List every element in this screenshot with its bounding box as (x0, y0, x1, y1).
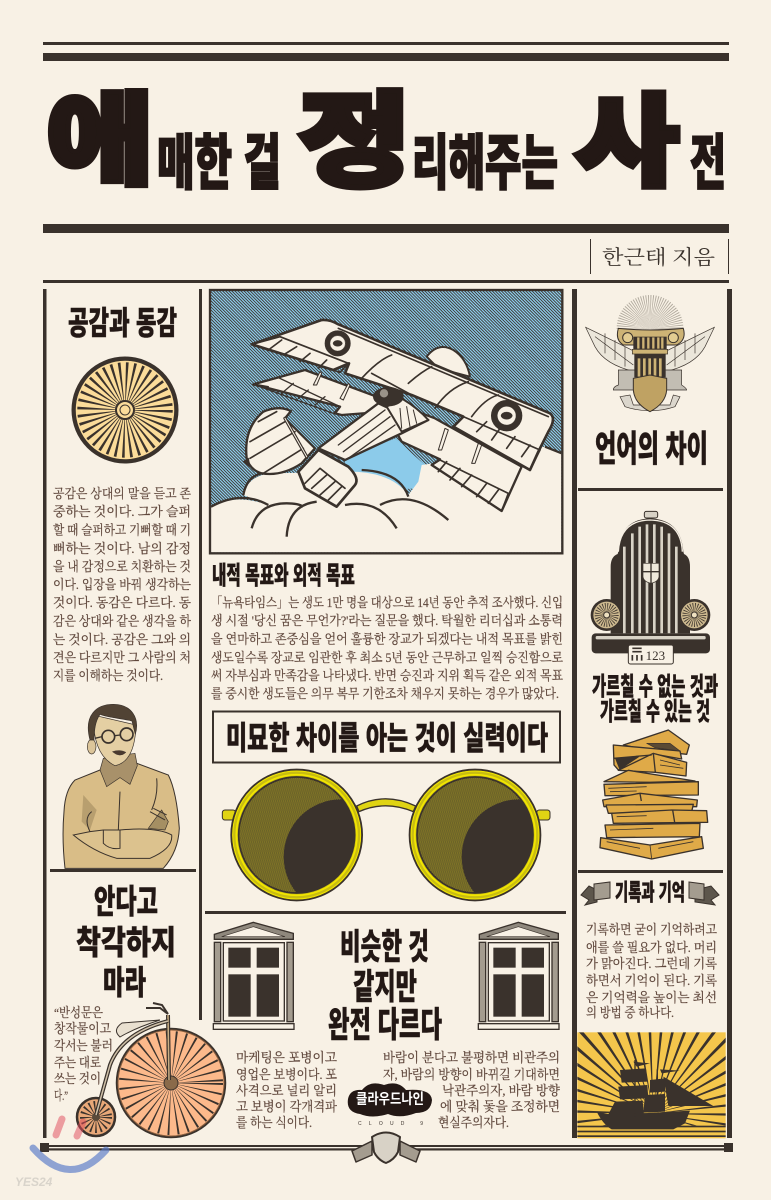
title: 매한 걸 (157, 130, 281, 197)
headline box (213, 712, 560, 762)
body text: empathy: 것이다. 동감은 다르다. 동 (53, 595, 191, 610)
body text: empathy: 는 것이다. 공감은 그와 의 (53, 632, 191, 647)
body text: wind: 자, 바람의 방향이 바뀌길 기대하면 (383, 1067, 560, 1082)
ribbon heading: record and memory: 기록과 기억 (615, 879, 685, 905)
body text: empathy (53, 486, 191, 683)
body text: New York Times study (211, 595, 563, 701)
biplane (243, 320, 553, 511)
watermark: YES24 smile (15, 1119, 106, 1189)
publisher logo: 클라우드나인 (356, 1091, 424, 1108)
body text: wind: 에 맞춰 돛을 조정하면 (440, 1099, 560, 1114)
heading: teachable and unteachable (592, 673, 718, 726)
title: 전 (690, 130, 726, 197)
portrait: author (63, 704, 179, 868)
body text: record: 애를 쓸 필요가 없다. 머리 (586, 940, 717, 955)
body text: New York Times study: 을 연마하고 존중심을 얻어 훌륭한 장교가 되겠다는 내적 목표를 밝힌 (211, 632, 563, 646)
panel: empathy and sympathy (50, 305, 225, 1137)
section rule (578, 488, 723, 491)
body text: empathy: 지를 이해하는 것이다. (53, 668, 163, 683)
heading: internal and external goals: 내적 목표와 외적 목표 (212, 562, 355, 590)
heading: similar but different: 비슷한 것 (340, 928, 429, 967)
body text: empathy: 할 때 슬퍼하고 기뻐할 때 기 (53, 522, 191, 538)
sky and clouds (211, 438, 562, 555)
body text: empathy: 공감은 상대의 말을 듣고 존 (53, 486, 191, 501)
body text: New York Times study: 써 자부심과 만족감을 나타냈다. 반면 승진과 지위 획득 같은 외적 목표 (211, 668, 563, 683)
watermark: YES24 smile: YES24 (15, 1175, 53, 1189)
heading: do not mistake: 안다고 (94, 883, 158, 920)
quote text: “반성문은 (54, 1005, 103, 1020)
heading: do not mistake: 마라 (103, 964, 146, 1001)
column frame (40, 280, 733, 1152)
title: 리해주는 (412, 130, 558, 197)
heading: similar but different: 같지만 (353, 968, 417, 1007)
body text: marketing: 를 하는 식이다. (236, 1115, 312, 1130)
mid rule (205, 911, 566, 914)
body text: New York Times study: 생 시절 '당신 꿈은 무언가?'라는 질문을 했다. 탁월한 리더십과 소통력 (211, 613, 563, 628)
author credit: 한근태 지음 (602, 246, 715, 269)
body text: record (586, 922, 717, 1020)
body text: record: 하면서 기억이 된다. 기록 (586, 973, 717, 988)
icon: right window (478, 922, 559, 1029)
heading: similar but different: 완전 다르다 (328, 1006, 442, 1045)
sun rays (633, 312, 667, 345)
body text: record: 가 맑아진다. 그런데 기록 (586, 956, 717, 971)
body text: marketing: 사격으로 널리 알리 (236, 1083, 337, 1098)
quote text: 창작물이고 (54, 1021, 111, 1036)
body text: marketing (236, 1050, 337, 1130)
heading: empathy: 공감과 동감 (68, 305, 177, 341)
title (46, 84, 726, 199)
body text: empathy: 이다. 입장을 바꿔 생각하는 (53, 577, 191, 592)
body text: New York Times study: 「뉴욕타임스」는 생도 1만 명을 대상으로 14년 동안 추적 조사했다. 신입 (211, 595, 563, 610)
panel: biplane illustration (210, 290, 562, 555)
heading: do not mistake: 착각하지 (76, 924, 176, 961)
quote text: 주는 대로 (54, 1055, 101, 1070)
portrait rule (50, 869, 196, 872)
title: 애 (46, 86, 154, 198)
body text: empathy: 견은 다르지만 그 사람의 처 (53, 650, 191, 665)
body text: marketing: 마케팅은 포병이고 (236, 1050, 337, 1065)
icon: vintage car grille (591, 511, 710, 664)
body text: marketing: 영업은 보병이다. 포 (236, 1067, 337, 1082)
icon: stack of books (600, 730, 708, 859)
icon: round sunglasses (222, 768, 550, 902)
column capital (617, 328, 684, 345)
body text: empathy: 감은 상대와 같은 생각을 하 (53, 614, 191, 628)
banner (613, 370, 687, 390)
panel: sailing ship (577, 1032, 726, 1138)
heading: do not mistake (76, 883, 176, 1001)
quote text: 각서는 불러 (54, 1038, 113, 1053)
publisher logo (348, 1083, 432, 1127)
body text: New York Times study: 생도일수록 장교로 임관한 후 최소 5년 동안 근무하고 일찍 승진함으로 (211, 650, 563, 665)
body text: wind: 낙관주의자, 바람 방향 (442, 1083, 560, 1098)
icon: wheel (72, 356, 178, 464)
body text: empathy: 을 내 감정으로 치환하는 것 (53, 559, 191, 574)
heading: similar but different (328, 928, 442, 1045)
headline box: 미묘한 차이를 아는 것이 실력이다 (226, 720, 548, 756)
body text: marketing: 고 보병이 각개격파 (236, 1099, 337, 1114)
panel: column emblem (586, 312, 714, 412)
shield (633, 375, 667, 412)
heading: language difference: 언어의 차이 (595, 428, 708, 469)
header rules (43, 42, 729, 61)
laurel leaves (586, 327, 714, 372)
title lower rule (43, 224, 729, 233)
sky hatch (210, 290, 562, 553)
body text: empathy: 중하는 것이다. 그가 슬퍼 (53, 504, 191, 519)
icon: vintage car grille: 123 (646, 648, 665, 663)
author credit (590, 239, 729, 274)
body text: empathy: 뻐하는 것이다. 남의 감정 (53, 541, 191, 556)
quote text: 다.” (54, 1088, 68, 1103)
quote text: 쓰는 것이 (54, 1071, 101, 1086)
body text: record: 기록하면 굳이 기억하려고 (586, 922, 717, 937)
body text: wind: 현실주의자다. (438, 1115, 509, 1130)
icon: bottom shield (352, 1132, 420, 1163)
title: 사 (575, 87, 679, 199)
quote text (54, 1005, 113, 1103)
icon: penny farthing bicycle (77, 1003, 225, 1137)
publisher logo: CLOUD 9 (358, 1121, 423, 1127)
body text: wind (383, 1050, 560, 1130)
body text: New York Times study: 를 중시한 생도들은 의무 복무 기한조차 채우지 못하는 경우가 많았다. (211, 686, 559, 701)
title: 정 (298, 84, 411, 199)
section rule (578, 870, 723, 873)
icon: left window (213, 922, 294, 1029)
body text: record: 은 기억력을 높이는 최선 (586, 990, 717, 1005)
body text: record: 의 방법 중 하나다. (586, 1005, 674, 1020)
body text: wind: 바람이 분다고 불평하면 비관주의 (383, 1050, 560, 1065)
